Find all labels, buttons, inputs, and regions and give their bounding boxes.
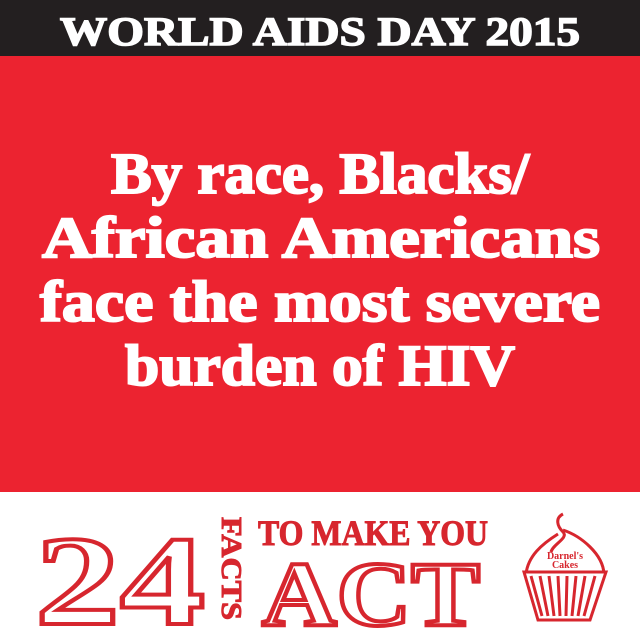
title: WORLD AIDS DAY 2015 [60,9,580,54]
logo: 24 facts to make you act [35,510,488,640]
main statement: burden of HIV [125,333,515,398]
header bar [0,0,640,56]
main statement: African Americans [42,205,600,270]
main statement [40,141,600,398]
red panel [0,56,640,492]
icon: cupcake logo: Cakes [552,560,578,571]
FACTS vertical: FACTS [215,517,246,620]
icon: cupcake logo [524,514,606,620]
TO MAKE YOU: TO MAKE YOU [258,513,488,553]
icon: cupcake logo: Darnel's [547,551,583,562]
main statement: By race, Blacks/ [111,141,530,206]
main statement: face the most severe [40,269,600,334]
